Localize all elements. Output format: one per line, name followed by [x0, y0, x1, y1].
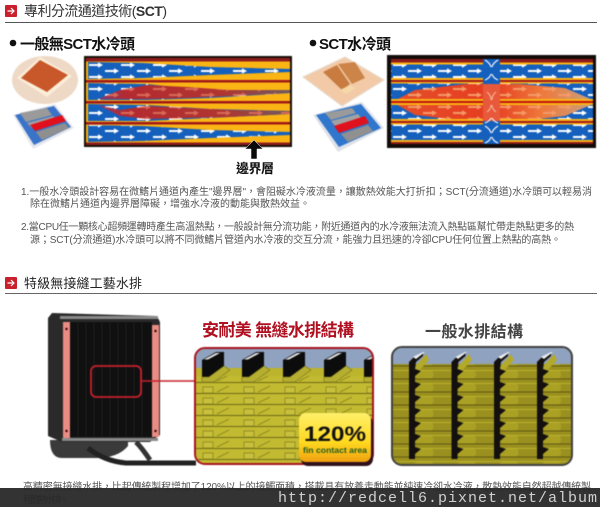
tube and base [50, 440, 196, 463]
text: radiator description [23, 480, 591, 506]
text: explanation 1: 除在微鰭片通道內邊界層障礙，增強水冷液的動能與散熱效益。 [30, 197, 310, 210]
badge: 120% [299, 413, 373, 466]
callout: highlight box [91, 366, 195, 397]
text: explanation 1: 1.一般水冷頭設計容易在微鰭片通道內產生"邊界層"，會阻礙水冷液流量，讓散熱效能大打折扣；SCT(分流通道)水冷頭可以輕易消 [21, 185, 592, 198]
watermark bar: http://redcell6.pixnet.net/album [278, 490, 597, 507]
panel: standard fins [392, 347, 572, 466]
section header: seamless radiator [5, 276, 597, 294]
channel walls right [500, 59, 593, 144]
channel 3 [88, 104, 290, 121]
section header: SCT [5, 3, 597, 23]
text: radiator description: 高精密無接縫水排，比起傳統製程增加了120%以上的接觸面積，搭載具有放養走動能並純速冷卻水冷液，散熱效能自然超越傳統製 [23, 480, 591, 493]
diagram: flow with SCT [387, 55, 596, 148]
watermark bar [0, 488, 600, 507]
icon: SCT cold plate [303, 57, 384, 106]
icon: CPU right [313, 102, 384, 152]
heading: standard structure: 一般水排結構 [425, 322, 523, 341]
channel 1 [88, 62, 290, 79]
heading: without SCT: 一般無SCT水冷頭 [20, 35, 135, 53]
text: explanation 2: 源；SCT(分流通道)水冷頭可以將不同微鰭片管道內水冷液的交互分流，能強力且迅速的冷卻CPU任何位置上熱點的高熱。 [30, 233, 561, 246]
channel 2 [88, 83, 290, 100]
label: boundary layer: 邊界層 [236, 161, 274, 176]
gap block [483, 59, 500, 144]
channel 4 [88, 125, 290, 142]
section header: SCT: 專利分流通道技術(SCT) [24, 3, 167, 19]
arrow: boundary layer pointer [245, 140, 263, 159]
icon: standard cold plate [12, 56, 78, 104]
icon: CPU left [13, 104, 74, 149]
text: radiator description: 程散熱水排。 [23, 493, 69, 506]
text: explanation 2: 2.當CPU任一顆核心超頻運轉時產生高溫熱點，一般設計無分流功能，附近通道內的水冷液無法流入熱點區幫忙帶走熱點更多的熱 [21, 220, 574, 233]
text: explanation 2 [21, 220, 574, 246]
radiator photo [48, 313, 196, 463]
badge: 120%: 120% [304, 423, 366, 446]
heading: seamless structure: 安耐美 無縫水排結構 [202, 320, 354, 340]
heat zone [392, 84, 593, 121]
channel walls left [391, 59, 483, 144]
section header: seamless radiator: 特級無接縫工藝水排 [24, 276, 142, 291]
panel: seamless fins [195, 348, 392, 466]
heading: with SCT: SCT水冷頭 [319, 35, 391, 53]
text: explanation 1 [21, 185, 592, 210]
badge: 120%: fin contact area [303, 445, 367, 455]
diagram: flow without SCT [84, 56, 292, 147]
